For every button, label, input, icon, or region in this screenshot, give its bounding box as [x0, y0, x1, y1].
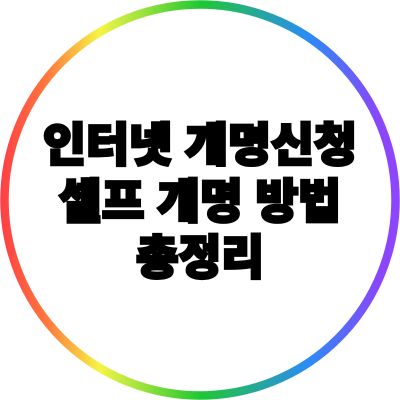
- title line 1: 인터넷 개명신청: [43, 119, 357, 171]
- title: [43, 119, 357, 284]
- title line 2: 셀프 개명 방법: [59, 175, 341, 228]
- title line 3: 총정리: [136, 231, 264, 284]
